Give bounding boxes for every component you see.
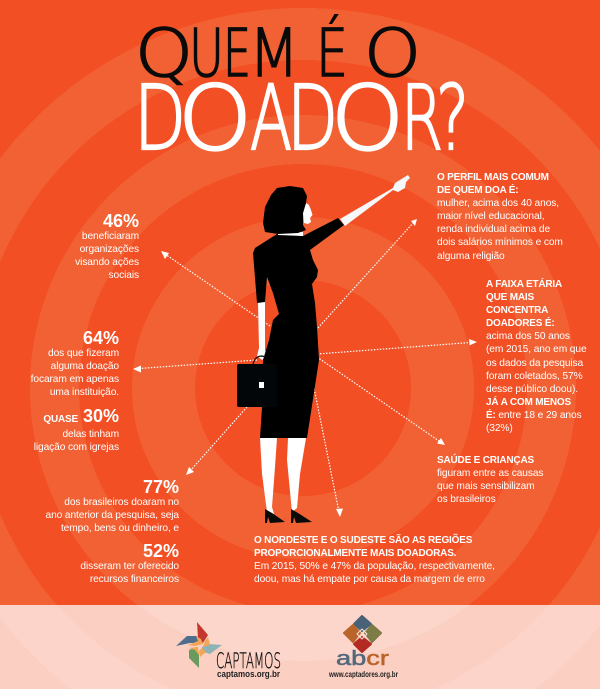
stat: 46%: 46% [103, 211, 139, 231]
title line 1: Q [135, 15, 193, 92]
title line 1: O [364, 15, 421, 92]
text: faixa etária: CONCENTRA [486, 305, 548, 316]
diamond icon [344, 616, 381, 652]
text: faixa etária: A FAIXA ETÁRIA [486, 279, 562, 290]
stat: 77%: ano anterior da pesquisa, seja [46, 510, 179, 521]
text: perfil mais comum: O PERFIL MAIS COMUM [437, 172, 549, 183]
title line 1: E [223, 15, 251, 92]
text: perfil mais comum: mulher, acima dos 40 anos, [437, 198, 559, 209]
text: perfil mais comum: maior nível educacional, [437, 211, 544, 222]
text: saúde e crianças [437, 454, 544, 505]
stat: 64%: dos que fizeram [48, 348, 119, 359]
text: faixa etária: DOADORES É: [486, 318, 554, 329]
text: faixa etária: (em 2015, ano em que [486, 344, 587, 355]
url: www.captadores.org.br [328, 669, 399, 679]
text: faixa etária: JÁ A COM MENOS [486, 397, 571, 408]
stat: 52%: 52% [143, 541, 179, 561]
wordmark: CAPTAMOS [216, 649, 281, 673]
abcr wordmark: ab cr [336, 648, 389, 670]
stat: 77%: tempo, bens ou dinheiro, e [61, 523, 179, 534]
text: saúde e crianças: SAÚDE E CRIANÇAS [437, 455, 534, 466]
stat: 77%: dos brasileiros doaram no [64, 497, 179, 508]
neck collar [278, 232, 303, 236]
text: nordeste e sudeste [254, 534, 495, 585]
text: perfil mais comum [437, 172, 563, 262]
text: saúde e crianças: os brasileiros [437, 494, 496, 505]
text: nordeste e sudeste: O NORDESTE E O SUDESTE SÃO AS REGIÕES [254, 535, 472, 546]
raised arm and hand [340, 175, 410, 226]
stat: 52%: recursos financeiros [90, 574, 179, 585]
lowered arm [257, 302, 267, 360]
hair [263, 186, 307, 234]
title line 1: É [316, 14, 348, 92]
title line 1 [135, 14, 421, 92]
stat: 64%: 64% [83, 328, 119, 348]
text: faixa etária [486, 278, 587, 434]
text: faixa etária: (32%) [486, 423, 513, 434]
stat: 46%: beneficiaram [82, 231, 139, 242]
stat: 64%: alguma doação [51, 361, 119, 372]
text: saúde e crianças: que mais sensibilizam [437, 481, 535, 492]
pinwheel icon [176, 622, 222, 668]
title [134, 14, 469, 160]
stat: 46% [75, 211, 139, 281]
stat: quase 30%: QUASE 30% [43, 406, 119, 426]
dress [253, 218, 344, 438]
stat: quase 30% [34, 406, 119, 453]
text: perfil mais comum: renda individual acima de [437, 224, 550, 235]
text: perfil mais comum: dois salários mínimos e com [437, 237, 563, 248]
stat: 46%: visando ações [75, 257, 139, 268]
title line 1: U [189, 15, 224, 92]
text: faixa etária: É: entre 18 e 29 anos [486, 410, 582, 421]
text: faixa etária: desse público doou). [486, 384, 578, 395]
footer band [0, 605, 600, 689]
stat: 64%: uma instituição. [50, 387, 119, 398]
stat: 52%: disseram ter oferecido [80, 561, 179, 572]
title line 2 [134, 66, 469, 170]
text: faixa etária: os dados da pesquisa [486, 358, 583, 369]
stat: 52% [80, 541, 179, 585]
stat: 46%: sociais [109, 270, 139, 281]
text: faixa etária: foram coletados, 57% [486, 371, 583, 382]
text: saúde e crianças: figuram entre as causas [437, 468, 543, 479]
stat: 77%: 77% [143, 477, 179, 497]
text: perfil mais comum: alguma religião [437, 251, 505, 262]
text: nordeste e sudeste: PROPORCIONALMENTE MAIS DOADORAS. [254, 548, 456, 559]
stat: 64%: focaram em apenas [31, 374, 119, 385]
stat: 64% [30, 328, 119, 398]
stat: quase 30%: delas tinham [62, 429, 119, 440]
url: captamos.org.br [217, 669, 280, 680]
text: nordeste e sudeste: Em 2015, 50% e 47% da população, respectivamente, [254, 561, 495, 572]
title line 1: M [249, 15, 299, 92]
shoes [265, 509, 312, 523]
briefcase [237, 356, 277, 407]
legs [260, 438, 306, 514]
stat: 46%: organizações [80, 244, 139, 255]
stat: 77% [46, 477, 180, 534]
text: nordeste e sudeste: doou, mas há empate por causa da margem de erro [254, 574, 485, 585]
face [303, 203, 312, 224]
text: perfil mais comum: DE QUEM DOA É: [437, 185, 518, 196]
stat: quase 30%: ligação com igrejas [34, 442, 119, 453]
text: faixa etária: QUE MAIS [486, 292, 534, 303]
text: faixa etária: acima dos 50 anos [486, 331, 570, 342]
